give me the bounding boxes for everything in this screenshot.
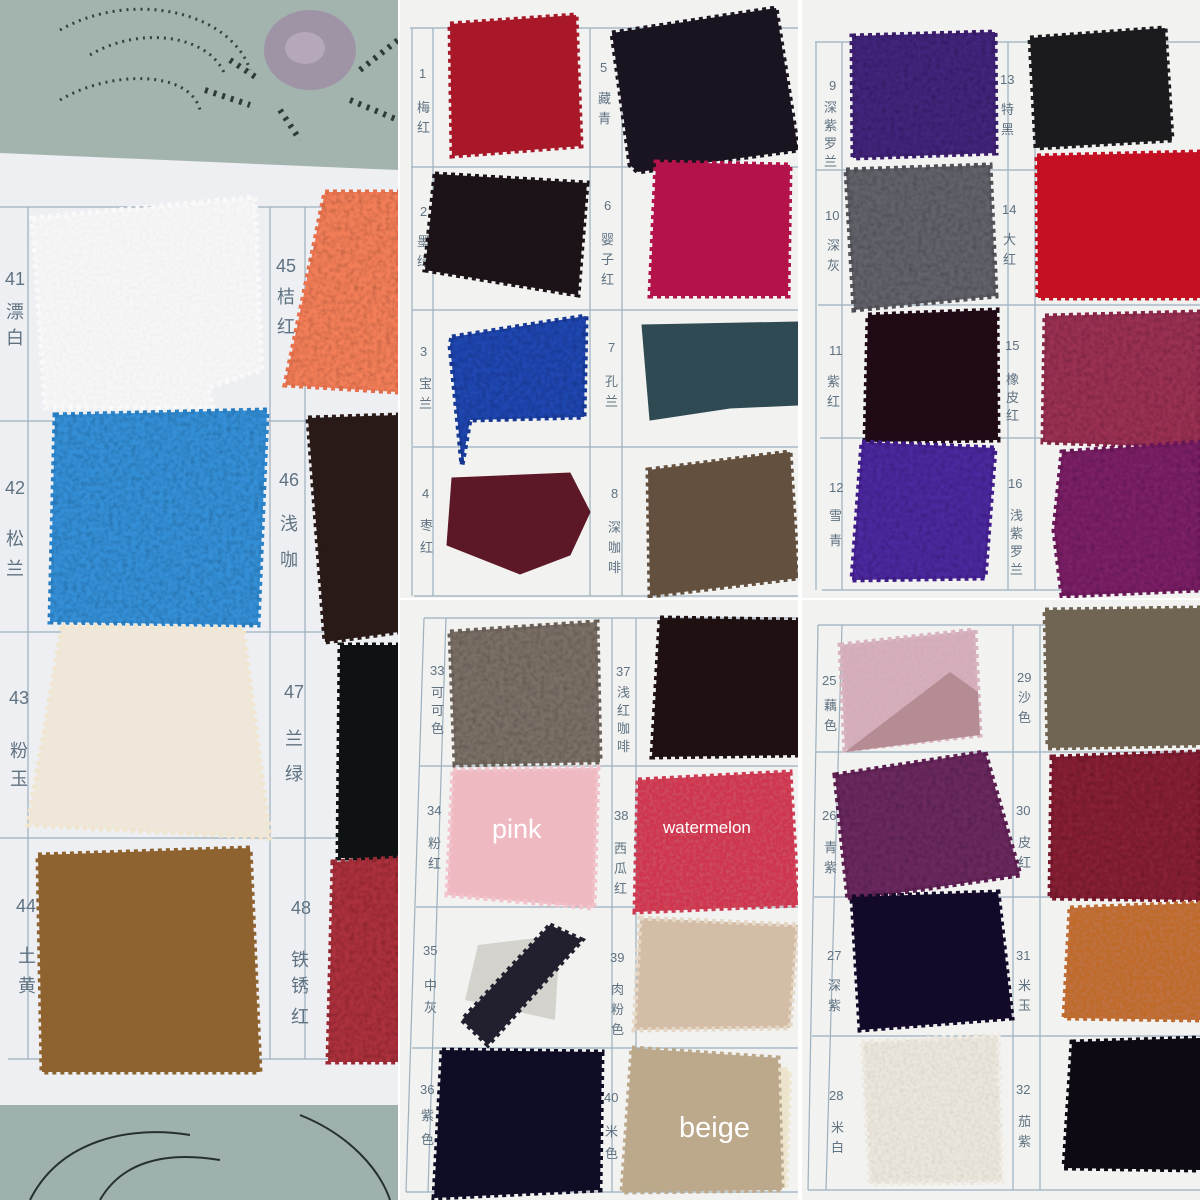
swatch 5 — [612, 8, 798, 172]
swatch 28 — [862, 1035, 1002, 1184]
swatch 15 — [1043, 312, 1200, 448]
swatch 13 — [1030, 28, 1172, 148]
labels 25-32: 30 — [1016, 803, 1030, 818]
swatch 14 — [1037, 152, 1200, 298]
labels 9-16: 11 — [829, 343, 842, 358]
labels 41-48: 黄 — [18, 976, 36, 996]
panel: swatches 33-40 — [400, 600, 798, 1200]
labels 9-16: 16 — [1008, 476, 1022, 491]
labels 41-48: 48 — [291, 898, 311, 918]
labels 33-40: 浅 — [617, 685, 630, 700]
labels 41-48: 浅 — [280, 514, 298, 534]
labels 41-48: 粉 — [10, 741, 28, 761]
labels 1-8: 兰 — [419, 396, 432, 411]
labels 41-48: 兰 — [285, 729, 303, 749]
labels 25-32: 色 — [824, 718, 837, 733]
labels 25-32: 米 — [1018, 978, 1031, 993]
labels 33-40: 色 — [605, 1146, 618, 1161]
labels 9-16: 深 — [824, 100, 837, 115]
swatch 36 — [434, 1050, 602, 1198]
swatch 46 dark brown — [308, 415, 398, 642]
labels 41-48: 红 — [277, 317, 295, 337]
labels 41-48: 松 — [6, 529, 24, 549]
labels 9-16: 罗 — [1010, 544, 1023, 559]
labels 1-8: 藏 — [598, 91, 611, 106]
labels 41-48: 漂 — [6, 302, 24, 322]
labels 41-48: 46 — [279, 470, 299, 490]
swatch 32 — [1064, 1038, 1200, 1170]
mat pattern top — [60, 9, 398, 140]
labels 9-16: 兰 — [1010, 562, 1023, 577]
labels 1-8: 红 — [420, 540, 433, 555]
labels 41-48: 铁 — [291, 950, 309, 970]
labels 41-48: 47 — [284, 682, 304, 702]
labels 33-40: 啡 — [617, 739, 630, 754]
swatch 33 — [450, 622, 600, 765]
labels 25-32: 色 — [1018, 710, 1031, 725]
labels 1-8: 红 — [601, 272, 614, 287]
labels 25-32: 玉 — [1018, 998, 1031, 1013]
labels 1-8: 3 — [420, 344, 427, 359]
labels 33-40: 可 — [431, 703, 444, 718]
labels 1-8: 孔 — [605, 374, 618, 389]
labels 9-16: 紫 — [824, 118, 837, 133]
labels 1-8: 青 — [598, 111, 611, 126]
labels 25-32: 29 — [1017, 670, 1031, 685]
labels 33-40: 35 — [423, 943, 437, 958]
swatch 2 — [425, 174, 587, 295]
swatch 9 — [852, 32, 996, 158]
labels 33-40: 粉 — [428, 836, 441, 851]
labels 9-16: 灰 — [827, 258, 840, 273]
swatch 47 black — [338, 645, 398, 858]
labels 33-40: 红 — [428, 856, 441, 871]
labels 41-48: 土 — [18, 946, 36, 966]
labels 33-40: 肉 — [611, 982, 624, 997]
labels 1-8: 啡 — [608, 560, 621, 575]
labels 41-48: 锈 — [291, 976, 309, 996]
labels 25-32: 26 — [822, 808, 836, 823]
swatch 8 — [648, 452, 798, 596]
swatch 27 — [852, 892, 1012, 1030]
labels 1-8: 2 — [420, 204, 427, 219]
labels 9-16: 9 — [829, 78, 836, 93]
labels 41-48: 43 — [9, 688, 29, 708]
labels 25-32: 米 — [831, 1120, 844, 1135]
labels 33-40: 36 — [420, 1082, 434, 1097]
labels 41-48 — [5, 256, 311, 1027]
swatch 34 — [447, 768, 598, 908]
swatch 39 — [634, 918, 798, 1030]
labels 1-8: 宝 — [419, 376, 432, 391]
labels 9-16: 红 — [827, 394, 840, 409]
labels 33-40: 瓜 — [614, 861, 627, 876]
labels 9-16: 紫 — [1010, 526, 1023, 541]
swatch 11 — [865, 310, 998, 442]
labels 25-32: 白 — [831, 1140, 844, 1155]
labels 1-8: 兰 — [605, 394, 618, 409]
labels 25-32: 27 — [827, 948, 841, 963]
labels 9-16: 紫 — [827, 374, 840, 389]
labels 33-40: 色 — [431, 721, 444, 736]
labels 1-8: 4 — [422, 486, 429, 501]
labels 1-8: 7 — [608, 340, 615, 355]
labels 1-8 — [417, 60, 621, 575]
labels 25-32: 青 — [824, 840, 837, 855]
labels 41-48: 41 — [5, 269, 25, 289]
labels 33-40: 粉 — [611, 1002, 624, 1017]
labels 25-32: 31 — [1016, 948, 1030, 963]
labels 1-8: 深 — [608, 520, 621, 535]
labels 9-16: 浅 — [1010, 508, 1023, 523]
label: pink: pink — [492, 814, 542, 844]
swatch 40 — [622, 1048, 790, 1192]
labels 9-16: 12 — [829, 480, 843, 495]
labels 41-48: 白 — [6, 328, 24, 348]
labels 1-8: 6 — [604, 198, 611, 213]
labels 33-40: 咖 — [617, 721, 630, 736]
labels 25-32: 深 — [828, 978, 841, 993]
labels 41-48: 咖 — [280, 550, 298, 570]
labels 41-48: 44 — [16, 896, 36, 916]
labels 33-40: 40 — [604, 1090, 618, 1105]
labels 9-16: 红 — [1003, 252, 1016, 267]
labels 1-8: 1 — [419, 66, 426, 81]
labels 9-16: 红 — [1006, 408, 1019, 423]
paper sheet — [0, 153, 398, 1105]
swatch 35 — [462, 925, 582, 1045]
labels 33-40: 中 — [424, 978, 437, 993]
panel: swatches 9-16 — [802, 0, 1200, 598]
labels 25-32: 红 — [1018, 855, 1031, 870]
swatch 30 — [1050, 752, 1200, 900]
swatch 10 — [846, 165, 996, 310]
labels 25-32: 28 — [829, 1088, 843, 1103]
labels 25-32: 紫 — [1018, 1134, 1031, 1149]
swatch 45 orange — [285, 192, 398, 392]
labels 9-16: 10 — [825, 208, 839, 223]
labels 41-48: 兰 — [6, 559, 24, 579]
labels 25-32: 25 — [822, 673, 836, 688]
swatch 44 brown — [38, 848, 260, 1072]
labels 25-32: 沙 — [1018, 690, 1031, 705]
swatch 3 — [450, 316, 586, 465]
panel: swatches 41-48 — [0, 0, 398, 1200]
swatch 7 — [642, 322, 798, 420]
labels 33-40: 紫 — [421, 1108, 434, 1123]
labels 1-8: 8 — [611, 486, 618, 501]
swatch 6 — [650, 162, 790, 296]
labels 1-8: 墨 — [417, 234, 430, 249]
labels 33-40: 灰 — [424, 1000, 437, 1015]
labels 33-40: 38 — [614, 808, 628, 823]
labels 9-16: 青 — [829, 533, 842, 548]
labels 33-40: 34 — [427, 803, 441, 818]
labels 1-8: 红 — [417, 120, 430, 135]
labels 9-16: 深 — [827, 238, 840, 253]
labels 9-16: 罗 — [824, 136, 837, 151]
swatch 43 cream — [28, 626, 270, 838]
panel: swatches 25-32 — [802, 600, 1200, 1200]
labels 1-8: 梅 — [417, 100, 430, 115]
labels 41-48: 玉 — [10, 769, 28, 789]
labels 33-40: 可 — [431, 685, 444, 700]
labels 9-16: 13 — [1000, 72, 1014, 87]
labels 9-16: 皮 — [1006, 390, 1019, 405]
labels 9-16 — [824, 72, 1023, 577]
labels 9-16: 黑 — [1001, 122, 1014, 137]
labels 25-32: 32 — [1016, 1082, 1030, 1097]
swatch 31 — [1064, 903, 1200, 1020]
labels 41-48: 绿 — [285, 764, 303, 784]
labels 25-32: 紫 — [824, 860, 837, 875]
labels 33-40: 色 — [421, 1132, 434, 1147]
swatch 37 — [652, 618, 798, 757]
labels 9-16: 14 — [1002, 202, 1016, 217]
swatch 16 — [1054, 442, 1200, 596]
labels 9-16: 雪 — [829, 508, 842, 523]
labels 33-40 — [420, 663, 630, 1161]
labels 25-32 — [822, 670, 1031, 1155]
labels 25-32: 紫 — [828, 998, 841, 1013]
labels 1-8: 咖 — [608, 540, 621, 555]
label: beige: beige — [679, 1112, 750, 1144]
labels 41-48: 42 — [5, 478, 25, 498]
labels 33-40: 红 — [617, 703, 630, 718]
label: watermelon: watermelon — [662, 818, 751, 837]
labels 41-48: 45 — [276, 256, 296, 276]
labels 1-8: 婴 — [601, 232, 614, 247]
labels 33-40: 33 — [430, 663, 444, 678]
labels 9-16: 橡 — [1006, 372, 1019, 387]
labels 9-16: 兰 — [824, 154, 837, 169]
labels 9-16: 特 — [1001, 102, 1014, 117]
swatch 41 white — [32, 197, 262, 408]
labels 9-16: 大 — [1003, 232, 1016, 247]
panel: swatches 1-8 — [400, 0, 798, 598]
swatch 48 rust red — [328, 858, 398, 1062]
swatch 1 — [450, 15, 581, 156]
labels 41-48: 红 — [291, 1007, 309, 1027]
labels 41-48: 桔 — [277, 287, 295, 307]
labels 33-40: 37 — [616, 664, 630, 679]
swatch 4 — [447, 473, 590, 574]
labels 33-40: 39 — [610, 950, 624, 965]
labels 1-8: 5 — [600, 60, 607, 75]
labels 1-8: 子 — [601, 252, 614, 267]
labels 1-8: 枣 — [420, 518, 433, 533]
labels 33-40: 米 — [605, 1124, 618, 1139]
labels 33-40: 西 — [614, 841, 627, 856]
bottom mat — [29, 1114, 391, 1200]
swatch 12 — [852, 442, 995, 580]
labels 25-32: 茄 — [1018, 1114, 1031, 1129]
labels 9-16: 15 — [1005, 338, 1019, 353]
labels 25-32: 藕 — [824, 698, 837, 713]
swatch 26 — [835, 752, 1020, 900]
labels 33-40: 红 — [614, 881, 627, 896]
swatch 29 — [1045, 608, 1200, 748]
swatch 38 — [635, 772, 798, 912]
labels 33-40: 色 — [611, 1022, 624, 1037]
labels 1-8: 绿 — [417, 254, 430, 269]
labels 25-32: 皮 — [1018, 835, 1031, 850]
swatch 42 blue — [50, 410, 267, 625]
swatch 25 — [840, 630, 980, 752]
